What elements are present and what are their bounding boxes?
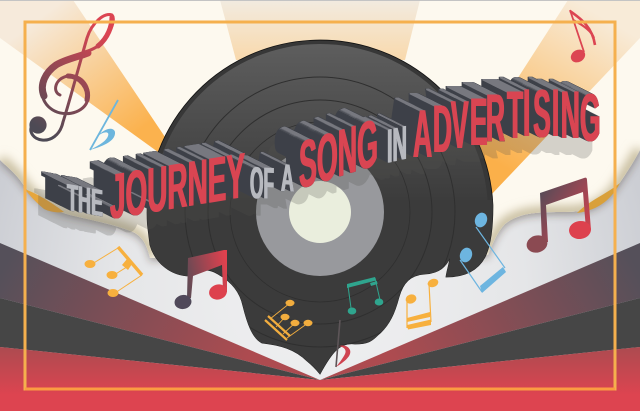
record centre hole	[289, 181, 351, 243]
teal beamed note	[347, 277, 383, 314]
record label ring	[256, 148, 384, 276]
title: The Journey of a Song in Advertising: OF	[250, 157, 274, 209]
title: The Journey of a Song in Advertising: SONG	[299, 104, 378, 204]
beamed note: left, dark to red	[173, 250, 229, 310]
flat sign: blue	[90, 100, 118, 150]
blue beamed note	[458, 211, 506, 293]
treble clef	[29, 14, 113, 140]
title: The Journey of a Song in Advertising	[67, 74, 601, 233]
yellow beamed note	[404, 277, 440, 330]
paper curl: right orange underside	[577, 183, 620, 213]
orange four-head note on record	[265, 300, 312, 340]
orange tilted note, left	[84, 247, 142, 297]
melting vinyl record	[140, 40, 500, 390]
floor stripes converging at centre	[0, 243, 640, 411]
top edge line	[0, 0, 640, 1]
paper curl: left orange underside	[20, 183, 64, 212]
title: The Journey of a Song in Advertising: THE	[67, 176, 103, 225]
title: The Journey of a Song in Advertising: JOURNEY	[110, 139, 245, 233]
title: The Journey of a Song in Advertising: A	[281, 157, 294, 201]
beamed note: large, right	[525, 178, 592, 255]
eighth note: red, top right	[569, 10, 595, 65]
title: The Journey of a Song in Advertising: IN	[387, 116, 407, 174]
title: The Journey of a Song in Advertising: ADVERTISING	[413, 74, 601, 171]
flat sign: bottom centre	[336, 320, 350, 367]
cream backdrop paper with sun rays	[0, 0, 640, 258]
